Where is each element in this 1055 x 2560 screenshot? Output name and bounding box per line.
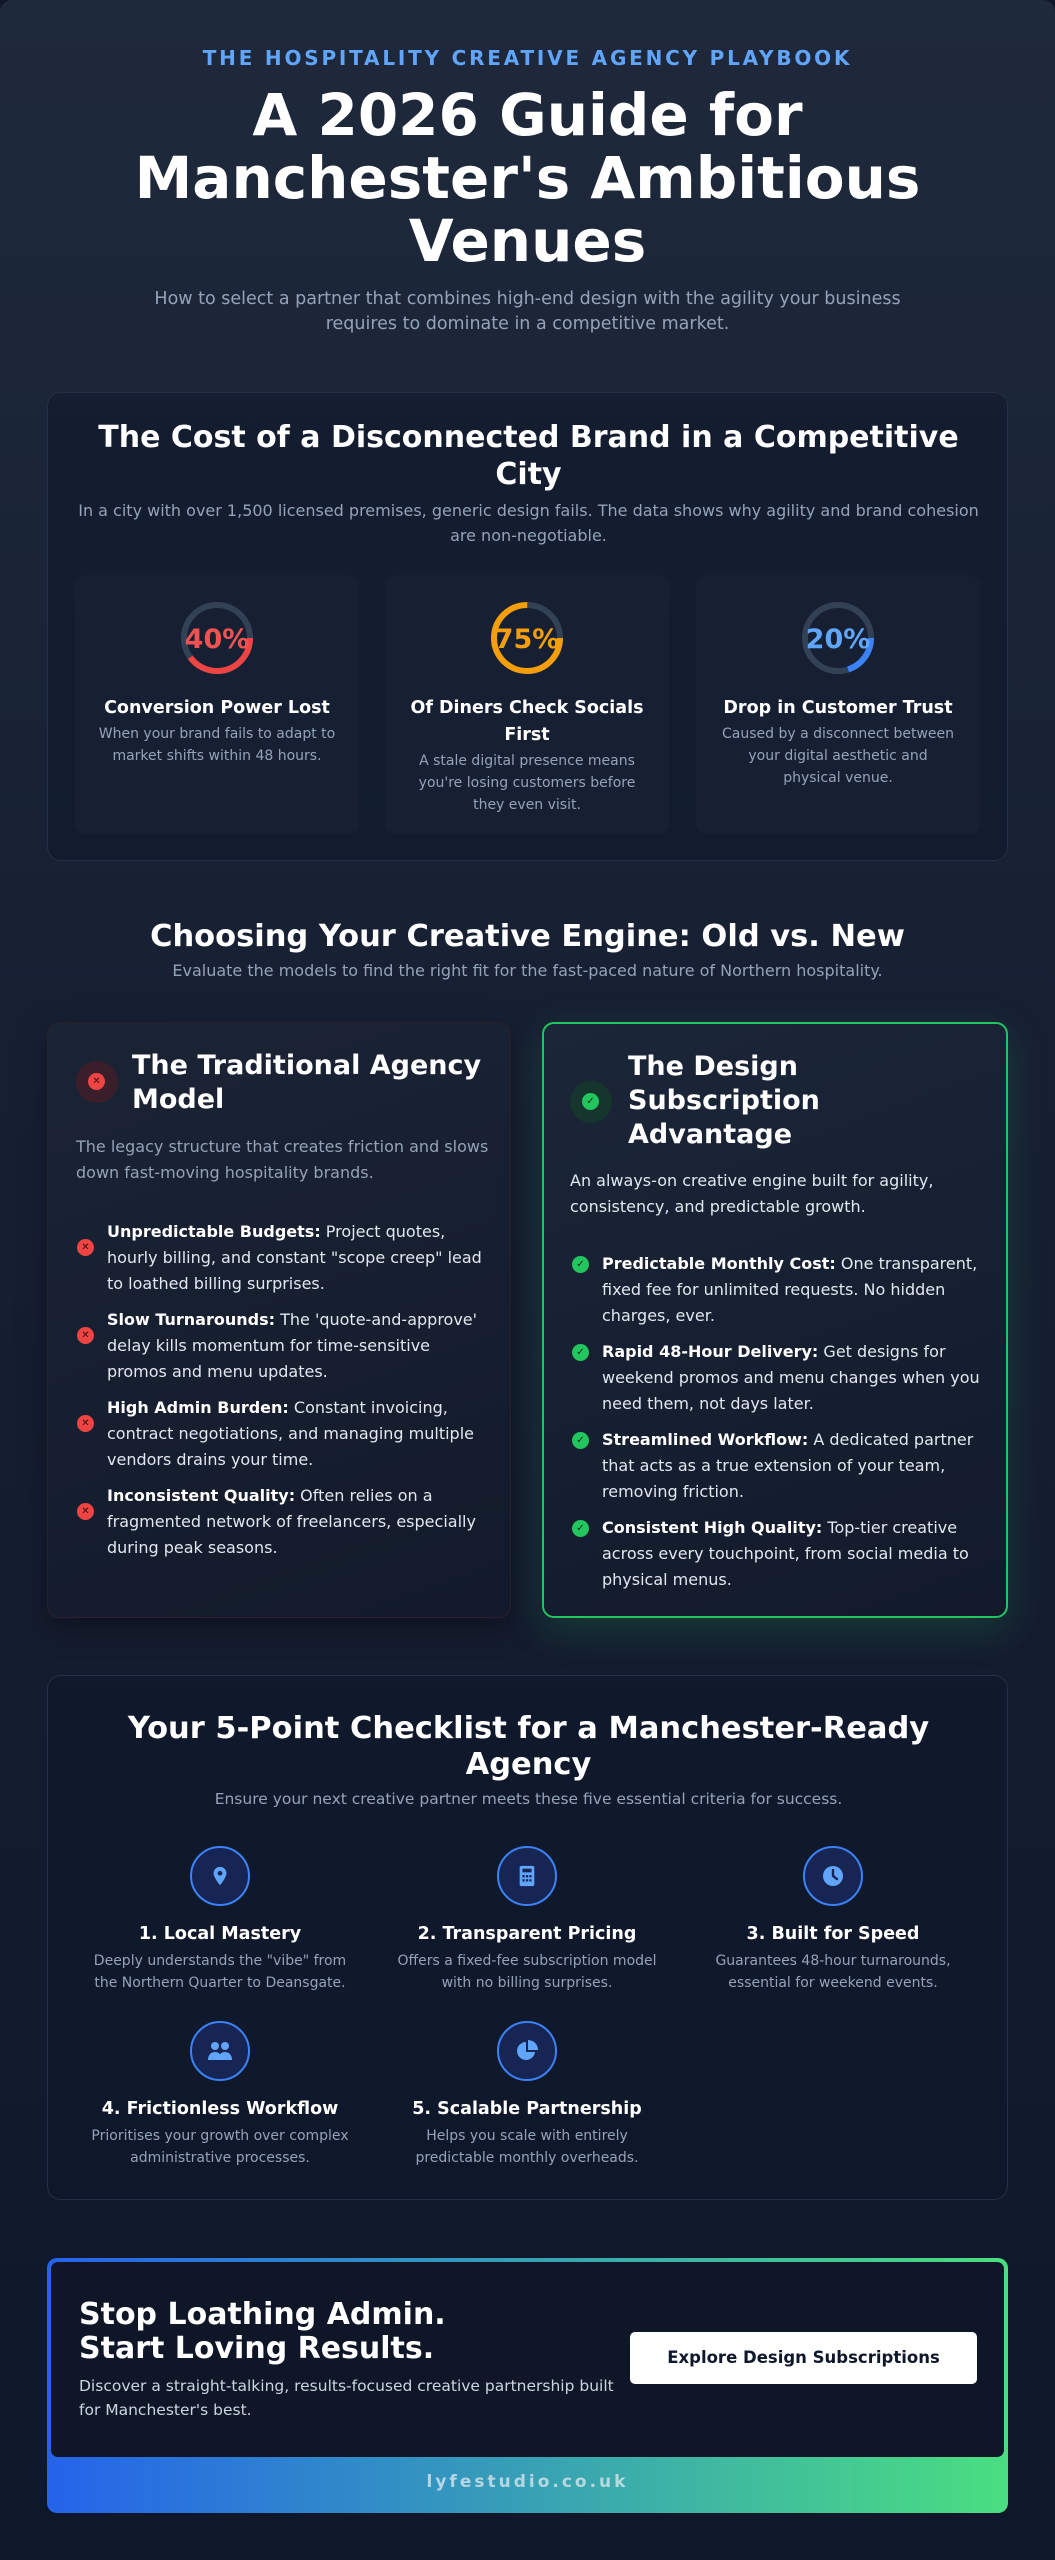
title: Manchester's Ambitious: [135, 144, 920, 212]
icon: clock: [803, 1846, 863, 1906]
checklist item 5: [412, 2021, 642, 2166]
cta box: [47, 2258, 1008, 2513]
list: problems: Unpredictable Budgets: Project quotes, hourly billing, and constant "scope creep" lead to loathed billing surprises.: [107, 1222, 482, 1293]
icon: check: [570, 1081, 612, 1123]
cta heading: Stop Loathing Admin.: [79, 2297, 446, 2332]
stat: 75%: Of Diners Check Socials First: [410, 698, 644, 745]
eyebrow: THE HOSPITALITY CREATIVE AGENCY PLAYBOOK: [203, 46, 852, 70]
icon: pie chart: [497, 2021, 557, 2081]
checklist item 5: 5. Scalable Partnership: [412, 2099, 642, 2119]
button: Explore Design Subscriptions: [667, 2348, 940, 2367]
icon: check: ✓: [586, 1096, 595, 1107]
icon: people: [190, 2021, 250, 2081]
card: design subscription: [542, 1022, 1008, 1618]
stat: 20%: [696, 575, 980, 834]
title: Venues: [409, 207, 646, 275]
list: benefits: Rapid 48-Hour Delivery: Get designs for weekend promos and menu changes when you need them, not days later.: [602, 1342, 980, 1413]
footer url: lyfestudio.co.uk: [427, 2472, 628, 2492]
list: benefits: Predictable Monthly Cost: One transparent, fixed fee for unlimited requests. No hidden charges, ever.: [602, 1254, 977, 1325]
stat: 40%: When your brand fails to adapt to market shifts within 48 hours.: [99, 726, 335, 764]
checklist item 3: 3. Built for Speed: [747, 1924, 919, 1944]
stat: 20%: Drop in Customer Trust: [723, 698, 953, 718]
checklist item 4: 4. Frictionless Workflow: [102, 2099, 338, 2119]
subheading: Evaluate the models to find the right fit for the fast-paced nature of Northern hospitality.: [172, 961, 883, 980]
stat: 75%: 75%: [495, 624, 559, 655]
cta heading: [79, 2297, 446, 2366]
heading: The Cost of a Disconnected Brand in a Competitive City: [98, 420, 959, 492]
list: benefits: Consistent High Quality: Top-tier creative across every touchpoint, from social media to physical menus.: [602, 1518, 969, 1589]
checklist item 4: [91, 2021, 349, 2166]
button: [630, 2332, 977, 2384]
list: benefits: Streamlined Workflow: A dedicated partner that acts as a true extension of your team, removing friction.: [602, 1430, 973, 1501]
description: An always-on creative engine built for agility, consistency, and predictable growth.: [570, 1171, 933, 1216]
title: [135, 81, 920, 275]
checklist item 3: [715, 1846, 951, 1991]
list: benefits: ✓: [576, 1523, 585, 1534]
cta inner: [51, 2262, 1004, 2457]
icon: pin: [190, 1846, 250, 1906]
icon: calculator: [497, 1846, 557, 1906]
checklist item 1: [94, 1846, 346, 1991]
heading: Your 5-Point Checklist for a Manchester-Ready Agency: [128, 1711, 929, 1782]
stat: 75%: [385, 575, 669, 834]
stat: 20%: 20%: [806, 624, 870, 655]
checklist item 3: Guarantees 48-hour turnarounds, essential for weekend events.: [715, 1953, 951, 1991]
stat: 40%: [75, 575, 359, 834]
checklist item 2: [397, 1846, 657, 1991]
checklist item 2: 2. Transparent Pricing: [418, 1924, 636, 1944]
panel: checklist: [47, 1675, 1008, 2200]
ring 40: [181, 602, 253, 674]
stat: 75%: A stale digital presence means you're losing customers before they even visit.: [419, 753, 635, 813]
list: benefits: ✓: [576, 1435, 585, 1446]
ring 75: [491, 602, 563, 674]
stat: 40%: Conversion Power Lost: [104, 698, 330, 718]
subheading: Ensure your next creative partner meets these five essential criteria for success.: [215, 1790, 842, 1808]
list: benefits: ✓: [576, 1347, 585, 1358]
list: problems: High Admin Burden: Constant invoicing, contract negotiations, and managing multiple vendors drains your time.: [107, 1398, 474, 1469]
checklist item 4: Prioritises your growth over complex administrative processes.: [91, 2128, 349, 2166]
cta text: Discover a straight-talking, results-focused creative partnership built for Manchester's best.: [79, 2377, 614, 2419]
description: The legacy structure that creates friction and slows down fast-moving hospitality brands.: [76, 1137, 488, 1182]
list: problems: Inconsistent Quality: Often relies on a fragmented network of freelancers, especially during peak seasons.: [107, 1486, 476, 1557]
checklist item 1: Deeply understands the "vibe" from the Northern Quarter to Deansgate.: [94, 1953, 346, 1991]
intro text: In a city with over 1,500 licensed premises, generic design fails. The data shows why agility and brand cohesion are non-negotiable.: [78, 501, 979, 545]
checklist item 5: Helps you scale with entirely predictable monthly overheads.: [415, 2128, 639, 2166]
panel: cost of disconnected brand: [47, 392, 1008, 861]
list: problems: ✕: [81, 1506, 90, 1517]
list: benefits: ✓: [576, 1259, 585, 1270]
title: The Design Subscription Advantage: [628, 1051, 820, 1150]
list: problems: ✕: [81, 1330, 90, 1341]
stat: 40%: 40%: [185, 624, 249, 655]
list: problems: ✕: [81, 1418, 90, 1429]
heading: old vs new: Choosing Your Creative Engine: Old vs. New: [150, 919, 905, 954]
checklist item 1: 1. Local Mastery: [139, 1924, 301, 1944]
stat: 20%: Caused by a disconnect between your digital aesthetic and physical venue.: [722, 726, 954, 786]
list: problems: ✕: [81, 1242, 90, 1253]
cta heading: Start Loving Results.: [79, 2331, 434, 2366]
icon: x: ✕: [92, 1076, 101, 1087]
list: benefits: [572, 1254, 980, 1589]
ring 20: [802, 602, 874, 674]
list: problems: [77, 1222, 482, 1557]
checklist item 2: Offers a fixed-fee subscription model with no billing surprises.: [397, 1953, 657, 1991]
subtitle: How to select a partner that combines high-end design with the agility your business requires to dominate in a competitive market.: [154, 289, 901, 334]
list: problems: Slow Turnarounds: The 'quote-and-approve' delay kills momentum for time-sensitive promos and menu updates.: [107, 1310, 477, 1381]
card: traditional agency: [47, 1022, 511, 1618]
title: The Traditional Agency Model: [132, 1050, 481, 1115]
title: A 2026 Guide for: [252, 81, 803, 149]
icon: x: [76, 1061, 118, 1103]
